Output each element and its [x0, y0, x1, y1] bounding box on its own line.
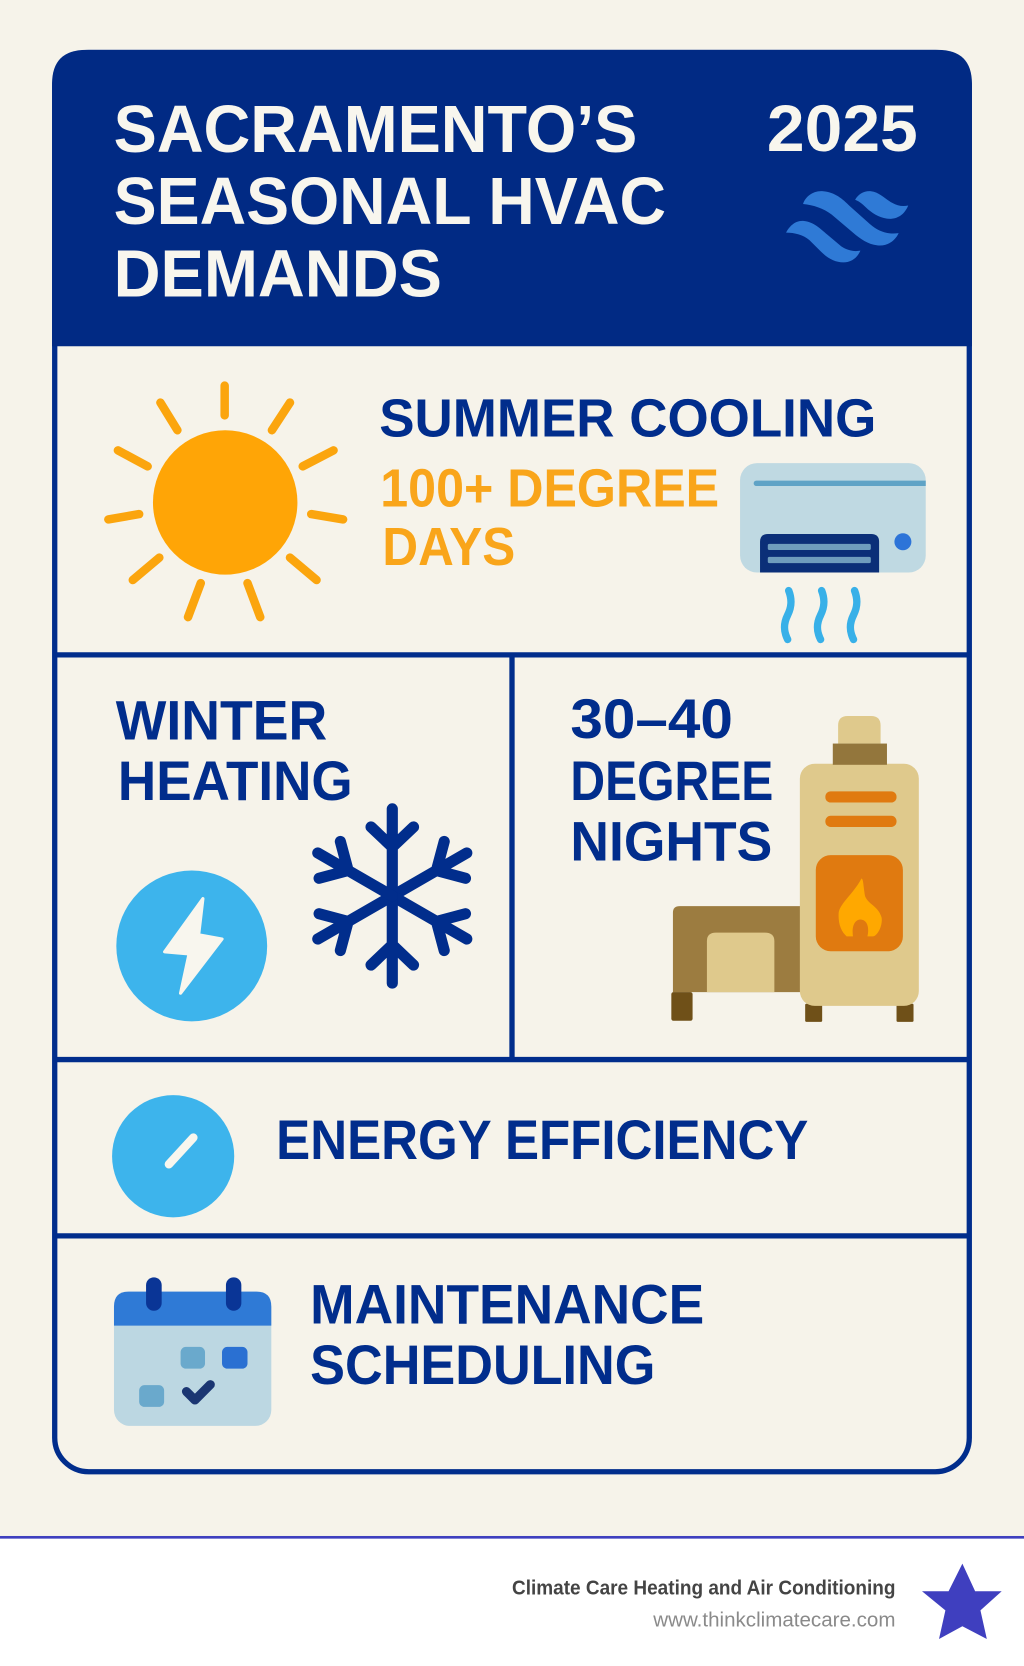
heading: maintenance scheduling	[310, 1274, 704, 1396]
icon: air conditioner	[740, 463, 926, 639]
title: SEASONAL HVAC	[114, 164, 666, 239]
icon: furnace	[671, 716, 919, 1022]
stat: 30-40 degree nights	[570, 688, 773, 872]
heading: summer cooling: SUMMER COOLING	[379, 389, 876, 449]
stat: 100+ degree days: 100+ DEGREE	[380, 459, 719, 519]
panel: energy efficiency	[112, 1095, 808, 1217]
icon: star logo	[922, 1564, 1002, 1639]
website: www.thinkclimatecare.com	[652, 1609, 895, 1631]
year: 2025	[767, 91, 918, 165]
stat: 100+ degree days	[380, 459, 719, 577]
icon: calendar	[114, 1277, 271, 1426]
stat: 30-40 degree nights: 30–40	[570, 688, 733, 750]
company name: Climate Care Heating and Air Conditioning	[512, 1576, 895, 1599]
heading: maintenance scheduling: SCHEDULING	[310, 1334, 655, 1396]
heading: winter heating: HEATING	[118, 750, 353, 812]
title: DEMANDS	[114, 236, 442, 311]
panel: card frame	[52, 50, 972, 1472]
title	[114, 92, 666, 311]
stat: 100+ degree days: DAYS	[382, 517, 515, 577]
footer	[0, 1536, 1024, 1666]
panel: maintenance scheduling	[114, 1274, 704, 1426]
icon: sun	[108, 386, 343, 617]
heading: winter heating	[116, 689, 353, 812]
title: SACRAMENTO’S	[114, 92, 637, 167]
icon: snowflake	[307, 809, 477, 983]
heading: winter heating: WINTER	[116, 689, 327, 751]
icon: lightning bolt	[116, 870, 267, 1021]
panel: winter heating	[116, 689, 477, 1021]
panel: winter temperature	[570, 688, 919, 1022]
panel: summer cooling	[108, 386, 926, 639]
heading: energy efficiency: ENERGY EFFICIENCY	[276, 1109, 808, 1171]
icon: gauge circle	[112, 1095, 234, 1217]
heading: maintenance scheduling: MAINTENANCE	[310, 1274, 704, 1336]
stat: 30-40 degree nights: NIGHTS	[570, 810, 772, 872]
icon: air waves	[786, 191, 908, 262]
stat: 30-40 degree nights: DEGREE	[570, 750, 773, 812]
panel: header	[114, 91, 918, 311]
